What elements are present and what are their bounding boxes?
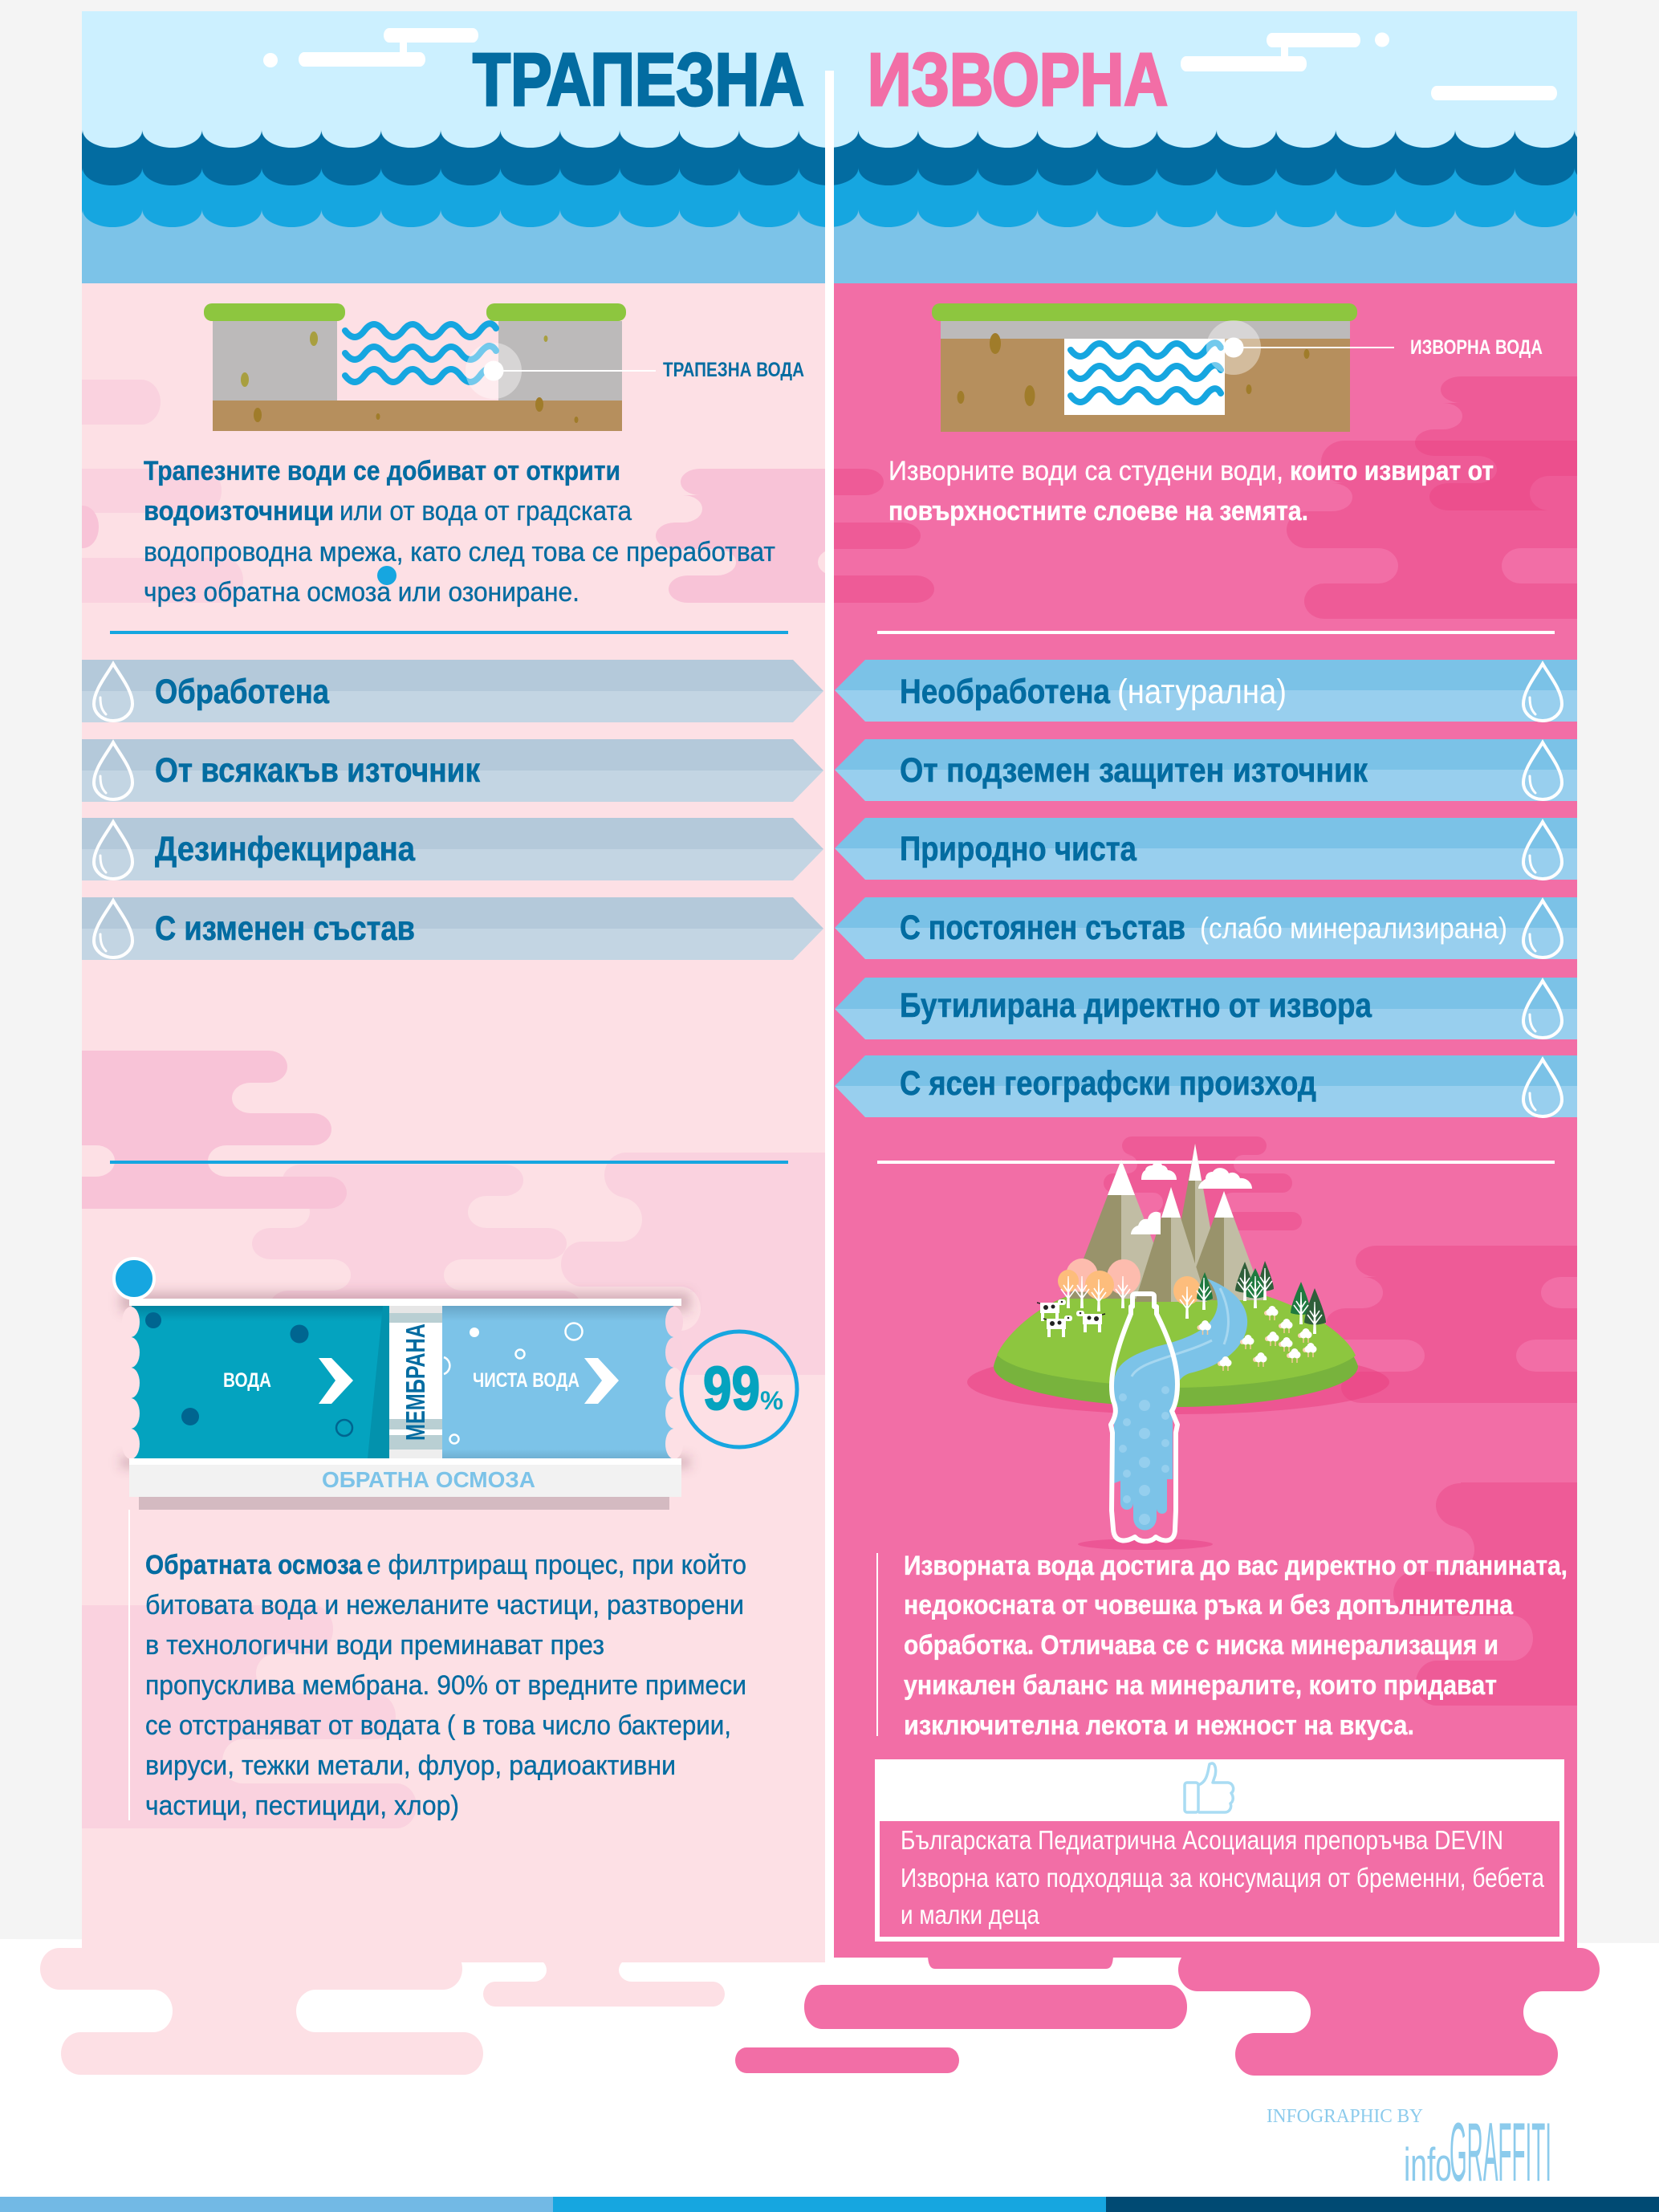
cows bbox=[1037, 1299, 1105, 1337]
bottle outline bbox=[1111, 1294, 1177, 1541]
item: с постоянен състав: (слабо минерализирана) bbox=[1200, 912, 1507, 945]
reverse osmosis diagram bbox=[114, 1258, 797, 1510]
item: бутилирана директно от извора: Бутилирана директно от извора bbox=[900, 986, 1372, 1025]
feed water tank bbox=[132, 1306, 389, 1458]
blue marker dot bbox=[114, 1258, 154, 1299]
bottle shadow bbox=[1078, 1539, 1213, 1550]
text block: spring water origin: изключителна лекота и нежност на вкуса. bbox=[904, 1710, 1414, 1741]
island shadow bbox=[967, 1350, 1389, 1414]
bottle water bbox=[1114, 1381, 1173, 1530]
background clouds left panel bbox=[48, 380, 835, 1828]
footer colour bar bbox=[0, 2197, 1659, 2212]
title: трапезна: ТРАПЕЗНА bbox=[473, 38, 804, 121]
panel: izvorna background bbox=[834, 283, 1577, 1958]
text block: spring water description bbox=[888, 456, 1494, 527]
membrane: МЕМБРАНА bbox=[401, 1324, 430, 1441]
text block: reverse osmosis: частици, пестициди, хлор) bbox=[145, 1791, 459, 1821]
text block: table water description: или от вода от градската bbox=[340, 496, 632, 527]
item: природно чиста bbox=[835, 818, 1577, 880]
text block: spring water description: които извират от bbox=[1290, 456, 1494, 486]
item: дезинфекцирана: Дезинфекцирана bbox=[155, 830, 416, 868]
illustration: mountain island and bottle bbox=[967, 1144, 1389, 1550]
base plate with caption bbox=[129, 1458, 681, 1510]
item: с изменен състав bbox=[82, 897, 823, 960]
item: обработена: Обработена bbox=[155, 673, 330, 711]
callout: pediatric recommendation: Изворна като подходяща за консумация от бременни, бебета bbox=[901, 1863, 1545, 1893]
clean water tank: ЧИСТА ВОДА bbox=[473, 1369, 579, 1392]
icon: thumbs up bbox=[1185, 1763, 1234, 1812]
text block: spring water origin: обработка. Отличава се с ниска минерализация и bbox=[904, 1630, 1498, 1661]
label: table water: ТРАПЕЗНА ВОДА bbox=[663, 359, 804, 381]
island bbox=[994, 1287, 1358, 1407]
river bbox=[1114, 1279, 1247, 1413]
text block: reverse osmosis bbox=[145, 1550, 746, 1821]
text block: spring water origin: уникален баланс на минералите, които придават bbox=[904, 1670, 1497, 1701]
99 percent badge: % bbox=[760, 1386, 783, 1415]
callout: pediatric recommendation bbox=[875, 1759, 1564, 1942]
text block: spring water origin: недокосната от човешка ръка и без допълнителна bbox=[904, 1590, 1514, 1620]
text block: table water description bbox=[144, 456, 775, 608]
feed water tank: ВОДА bbox=[223, 1369, 271, 1392]
item: обработена bbox=[82, 660, 823, 722]
decorative blue dot bbox=[377, 566, 396, 585]
text block: spring water description: Изворните води са студени води, bbox=[888, 456, 1283, 486]
callout: pediatric recommendation: и малки деца bbox=[901, 1900, 1040, 1929]
item: от подземен защитен източник: От подземен защитен източник bbox=[900, 751, 1368, 790]
text block: table water description: Трапезните води се добиват от открити bbox=[144, 456, 620, 486]
text block: reverse osmosis: Обратната осмоза bbox=[145, 1550, 363, 1580]
left feature list bbox=[82, 660, 823, 960]
text block: reverse osmosis: битовата вода и нежеланите частици, разтворени bbox=[145, 1590, 744, 1620]
item: от подземен защитен източник bbox=[835, 739, 1577, 801]
item: необработена bbox=[835, 660, 1577, 722]
text block: reverse osmosis: пропусклива мембрана. 90% от вредните примеси bbox=[145, 1670, 746, 1701]
background clouds right panel bbox=[803, 376, 1577, 1706]
item: природно чиста: Природно чиста bbox=[900, 830, 1137, 868]
callout: pediatric recommendation: Българската Педиатрична Асоциация препоръчва DEVIN bbox=[901, 1825, 1503, 1855]
center divider bbox=[825, 71, 834, 1958]
base plate with caption: ОБРАТНА ОСМОЗА bbox=[322, 1467, 535, 1492]
item: с изменен състав: С изменен състав bbox=[155, 909, 415, 948]
text block: reverse osmosis: вируси, тежки метали, флуор, радиоактивни bbox=[145, 1750, 676, 1781]
right feature list bbox=[835, 660, 1577, 1117]
round trees bbox=[1058, 1258, 1201, 1319]
membrane bbox=[389, 1306, 442, 1458]
vertical rule: left text bbox=[128, 1510, 130, 1820]
text block: table water description: водопроводна мрежа, като след това се преработват bbox=[144, 537, 775, 567]
item: дезинфекцирана bbox=[82, 818, 823, 880]
credit: infographic by infoGRAFFITI bbox=[1267, 2106, 1551, 2199]
99 percent badge bbox=[681, 1332, 797, 1447]
sheep bbox=[1197, 1306, 1316, 1371]
item: необработена: (натурална) bbox=[1117, 673, 1287, 711]
panel: trapezna background bbox=[82, 283, 825, 1962]
item: с постоянен състав bbox=[835, 897, 1577, 959]
item: с ясен географски произход bbox=[835, 1055, 1577, 1117]
item: бутилирана директно от извора bbox=[835, 978, 1577, 1039]
ground diagram: spring water bbox=[932, 303, 1394, 432]
soft shadow bbox=[120, 1292, 690, 1468]
item: с постоянен състав: С постоянен състав bbox=[900, 909, 1185, 947]
text block: reverse osmosis: е филтриращ процес, при който bbox=[367, 1550, 746, 1580]
mountain clouds bbox=[1131, 1163, 1252, 1234]
ground diagram: table water bbox=[204, 303, 656, 431]
item: от всякакъв източник bbox=[82, 739, 823, 802]
text block: reverse osmosis: се отстраняват от водата ( в това число бактерии, bbox=[145, 1710, 731, 1741]
bottom puddles: light pink bbox=[40, 1948, 725, 2075]
text block: table water description: чрез обратна осмоза или озониране. bbox=[144, 577, 579, 608]
item: с ясен географски произход: С ясен географски произход bbox=[900, 1064, 1316, 1103]
header: sky and waves bbox=[82, 11, 1577, 283]
text block: table water description: водоизточници bbox=[144, 496, 334, 527]
text block: spring water description: повърхностните слоеве на земята. bbox=[888, 496, 1308, 527]
title: изворна: ИЗВОРНА bbox=[868, 38, 1168, 121]
clouds in the sky bbox=[263, 28, 1557, 100]
text block: spring water origin: Изворната вода достига до вас директно от планината, bbox=[904, 1551, 1568, 1581]
99 percent badge: 99 bbox=[703, 1355, 760, 1423]
text block: spring water origin bbox=[904, 1551, 1568, 1741]
clean water tank bbox=[442, 1306, 673, 1458]
text block: reverse osmosis: в технологични води преминават през bbox=[145, 1630, 604, 1661]
credit: infographic by infoGRAFFITI: info bbox=[1404, 2139, 1452, 2191]
pine trees bbox=[1197, 1261, 1326, 1334]
credit: infographic by infoGRAFFITI: INFOGRAPHIC BY bbox=[1267, 2106, 1423, 2127]
bottom puddles: dark pink bbox=[735, 1948, 1600, 2076]
vertical rule: right text bbox=[876, 1553, 878, 1736]
item: необработена: Необработена bbox=[900, 673, 1111, 711]
label: spring water: ИЗВОРНА ВОДА bbox=[1410, 336, 1543, 359]
item: от всякакъв източник: От всякакъв източник bbox=[155, 751, 480, 790]
mountains bbox=[1068, 1144, 1264, 1302]
